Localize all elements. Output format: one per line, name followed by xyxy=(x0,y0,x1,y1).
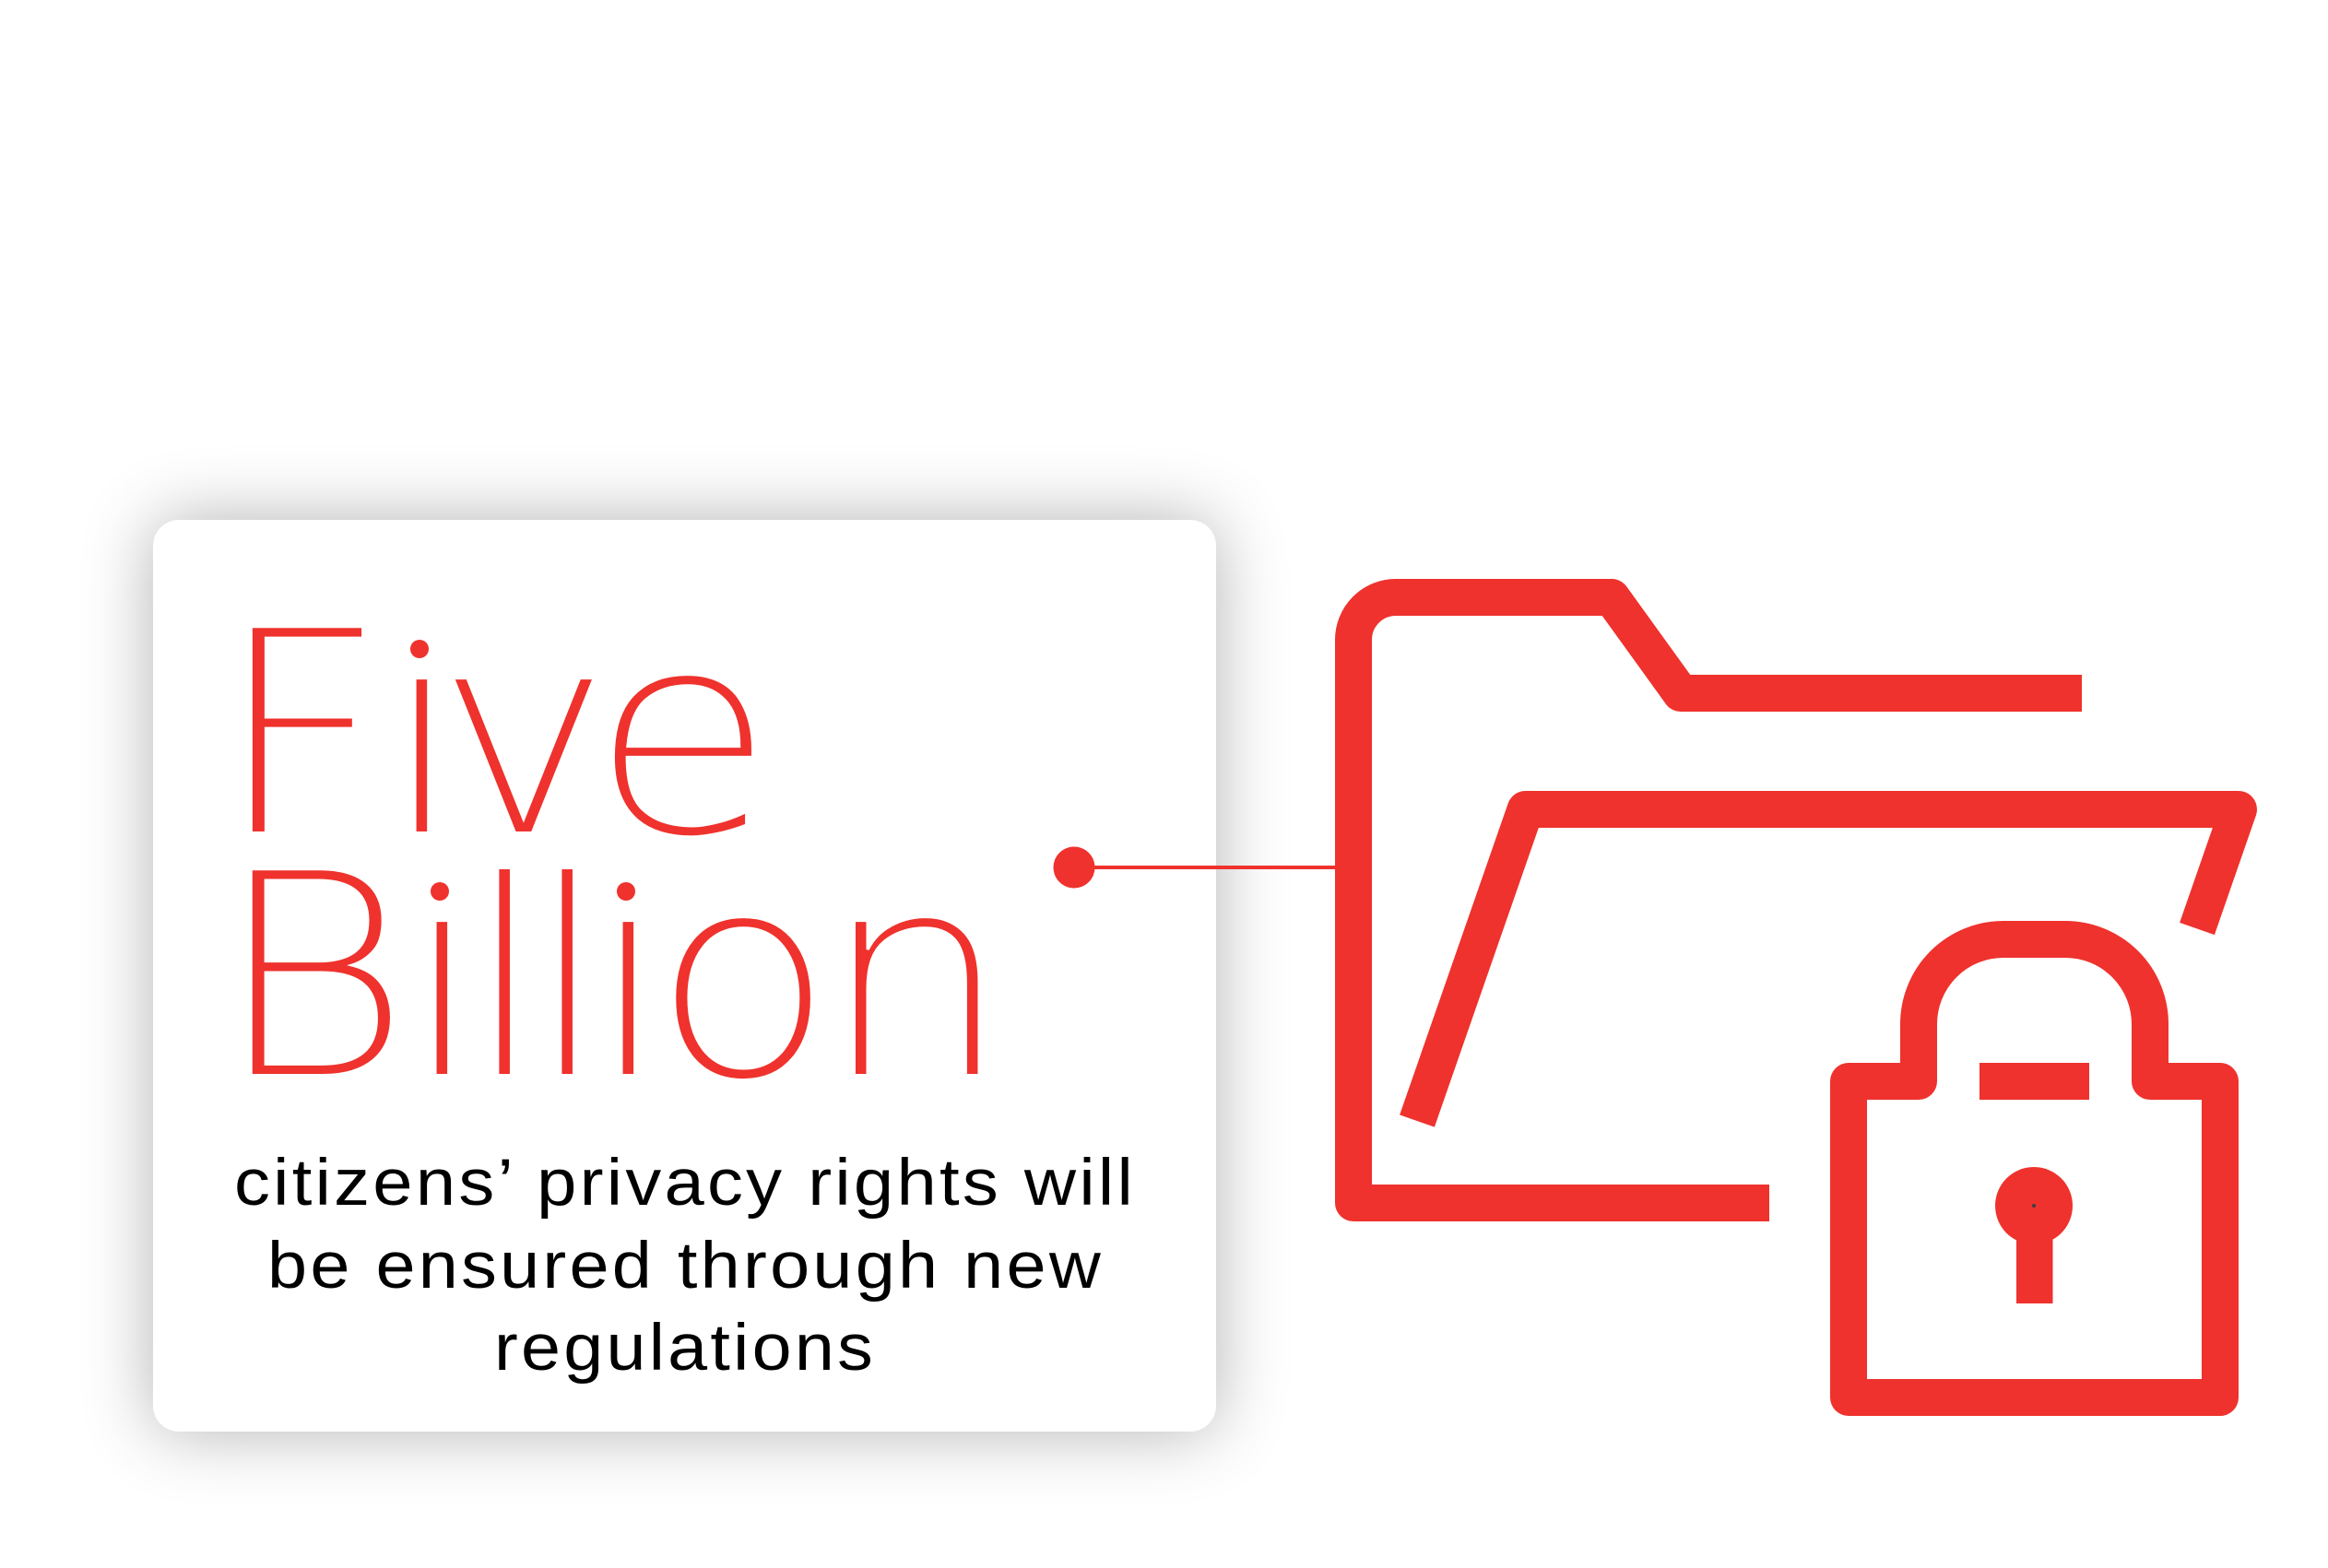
icon: padlock xyxy=(1849,939,2220,1397)
heading: Five: Five xyxy=(214,571,775,900)
folder front xyxy=(1417,809,2239,1121)
text block: description: citizens’ privacy rights will xyxy=(234,1147,1136,1220)
connector: dot and line to folder xyxy=(1053,846,1337,889)
icon: folder xyxy=(1353,597,2239,1203)
folder back xyxy=(1353,597,2082,1203)
text block: description xyxy=(234,1147,1136,1385)
text block: description: regulations xyxy=(494,1312,876,1385)
shackle gap bar xyxy=(1979,1063,2089,1100)
text block: description: be ensured through new xyxy=(267,1230,1104,1303)
keyhole xyxy=(1995,1167,2073,1303)
lock body and shackle xyxy=(1849,939,2220,1397)
heading: Billion: Billion xyxy=(214,813,1011,1142)
panel: white card xyxy=(153,520,1216,1432)
